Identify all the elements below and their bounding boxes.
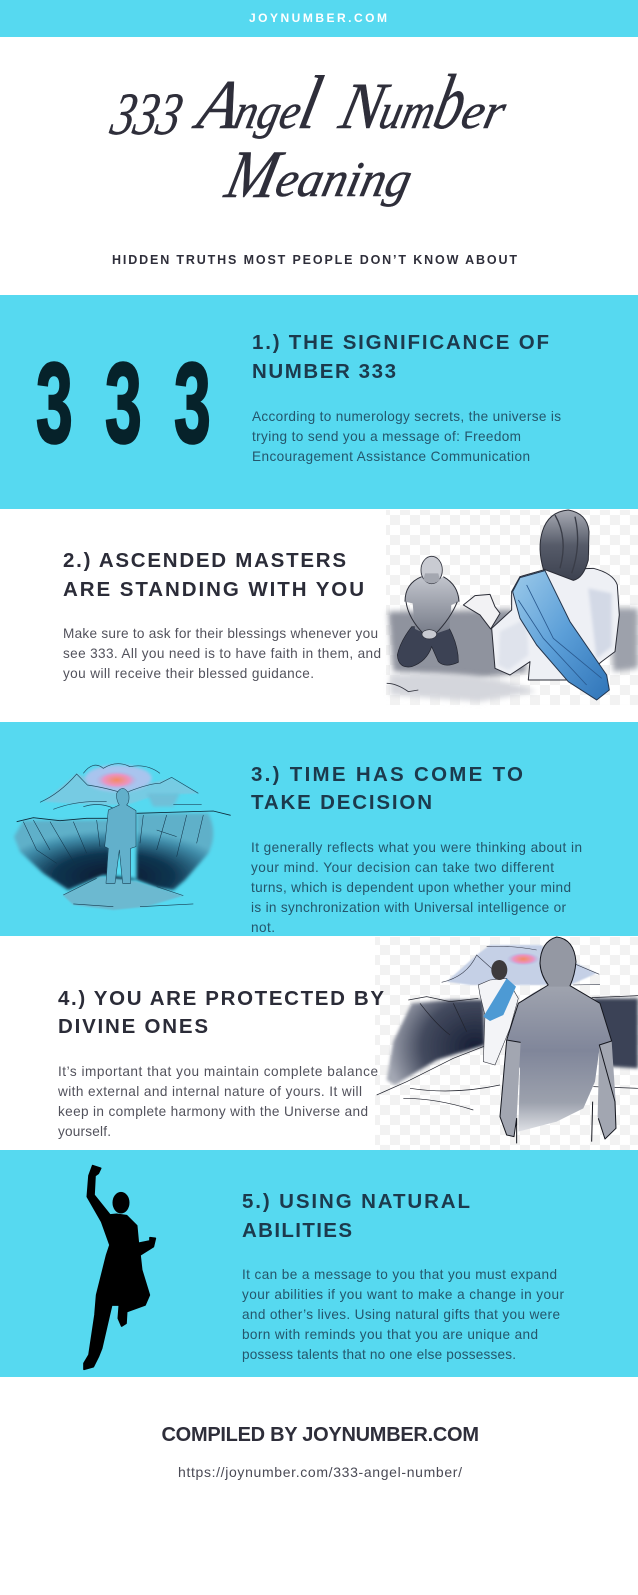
heading 3: 3.) TIME HAS COME TO xyxy=(251,763,523,786)
body 4: yourself. xyxy=(58,1124,111,1139)
heading 2: 2.) ASCENDED MASTERS xyxy=(63,549,346,572)
body 3: not. xyxy=(251,920,275,935)
body 5: and other’s lives. Using natural gifts that you were xyxy=(242,1307,560,1322)
icon: jumping silhouette xyxy=(84,1166,155,1369)
body 1: According to numerology secrets, the universe is xyxy=(252,409,561,424)
title: 333 xyxy=(105,82,189,148)
body 5: your abilities if you want to make a change in your xyxy=(242,1287,564,1302)
heading 1 xyxy=(252,331,549,383)
small Jesus figure xyxy=(478,960,518,1065)
top banner xyxy=(0,0,638,37)
heading 5 xyxy=(242,1190,470,1242)
heading 1: 1.) THE SIGNIFICANCE OF xyxy=(252,331,549,354)
body 4: It’s important that you maintain complete balance xyxy=(58,1064,378,1079)
body 3 xyxy=(251,840,582,935)
body 2: Make sure to ask for their blessings whenever you xyxy=(63,626,378,641)
large 333 numerals: 3 xyxy=(36,339,73,466)
large 333 numerals: 3 xyxy=(174,339,211,466)
title: nge xyxy=(229,84,307,139)
body 4: keep in complete harmony with the Universe and xyxy=(58,1104,368,1119)
title: M xyxy=(219,137,290,212)
body 3: your mind. Your decision can take two different xyxy=(251,860,554,875)
large foreground man xyxy=(500,937,616,1143)
body 1 xyxy=(252,409,561,464)
body 4 xyxy=(57,1064,378,1139)
illustration: man facing Jesus across a chasm xyxy=(375,937,638,1150)
body 2 xyxy=(63,626,381,681)
footer url: https://joynumber.com/333-angel-number/ xyxy=(178,1464,462,1480)
subtitle: HIDDEN TRUTHS MOST PEOPLE DON’T KNOW ABOUT xyxy=(112,253,517,267)
title: l xyxy=(292,60,330,145)
Jesus figure xyxy=(463,510,619,700)
title: eaning xyxy=(271,152,417,207)
panel: section 5 natural abilities xyxy=(0,1150,638,1377)
illustration: man on the edge of a chasm xyxy=(14,764,231,910)
body 3: is in synchronization with Universal intelligence or xyxy=(251,900,566,915)
banner site name: JOYNUMBER.COM xyxy=(249,11,387,25)
footer credit: COMPILED BY JOYNUMBER.COM xyxy=(162,1424,479,1446)
body 2: you will receive their blessed guidance. xyxy=(63,666,314,681)
large 333 numerals: 3 xyxy=(105,339,142,466)
kneeling man xyxy=(397,556,459,667)
title: b xyxy=(427,60,475,146)
heading 2: ARE STANDING WITH YOU xyxy=(63,578,364,601)
title: N xyxy=(333,70,396,143)
body 2: see 333. All you need is to have faith in them, and xyxy=(63,646,381,661)
title: A xyxy=(188,67,250,144)
title: um xyxy=(374,84,441,139)
panel: section 4 protected xyxy=(57,937,638,1150)
heading 2 xyxy=(63,549,364,601)
heading 3: TAKE DECISION xyxy=(251,791,432,814)
heading 3 xyxy=(251,763,523,814)
panel: section 3 decision xyxy=(0,722,638,936)
body 1: trying to send you a message of: Freedom xyxy=(252,429,521,444)
heading 5: ABILITIES xyxy=(242,1219,352,1242)
panel: section 1 significance xyxy=(0,295,638,509)
heading 5: 5.) USING NATURAL xyxy=(242,1190,470,1213)
illustration: kneeling man before Jesus xyxy=(386,510,638,705)
heading 4: 4.) YOU ARE PROTECTED BY xyxy=(58,987,384,1010)
title xyxy=(105,60,517,212)
body 5: possess talents that no one else possesses. xyxy=(242,1347,516,1362)
body 5: born with reminds you that you are unique and xyxy=(242,1327,538,1342)
panel: section 2 ascended masters xyxy=(63,510,638,705)
heading 4: DIVINE ONES xyxy=(58,1015,208,1038)
body 5: It can be a message to you that you must expand xyxy=(242,1267,557,1282)
heading 4 xyxy=(58,987,384,1038)
body 3: It generally reflects what you were thinking about in xyxy=(251,840,582,855)
body 4: with external and internal nature of yours. It will xyxy=(57,1084,362,1099)
heading 1: NUMBER 333 xyxy=(252,360,396,383)
large 333 numerals xyxy=(36,339,211,466)
title: er xyxy=(456,84,512,139)
body 1: Encouragement Assistance Communication xyxy=(252,449,530,464)
body 3: turns, which is dependent upon whether your mind xyxy=(251,880,571,895)
body 5 xyxy=(242,1267,564,1362)
standing figure xyxy=(105,788,136,883)
